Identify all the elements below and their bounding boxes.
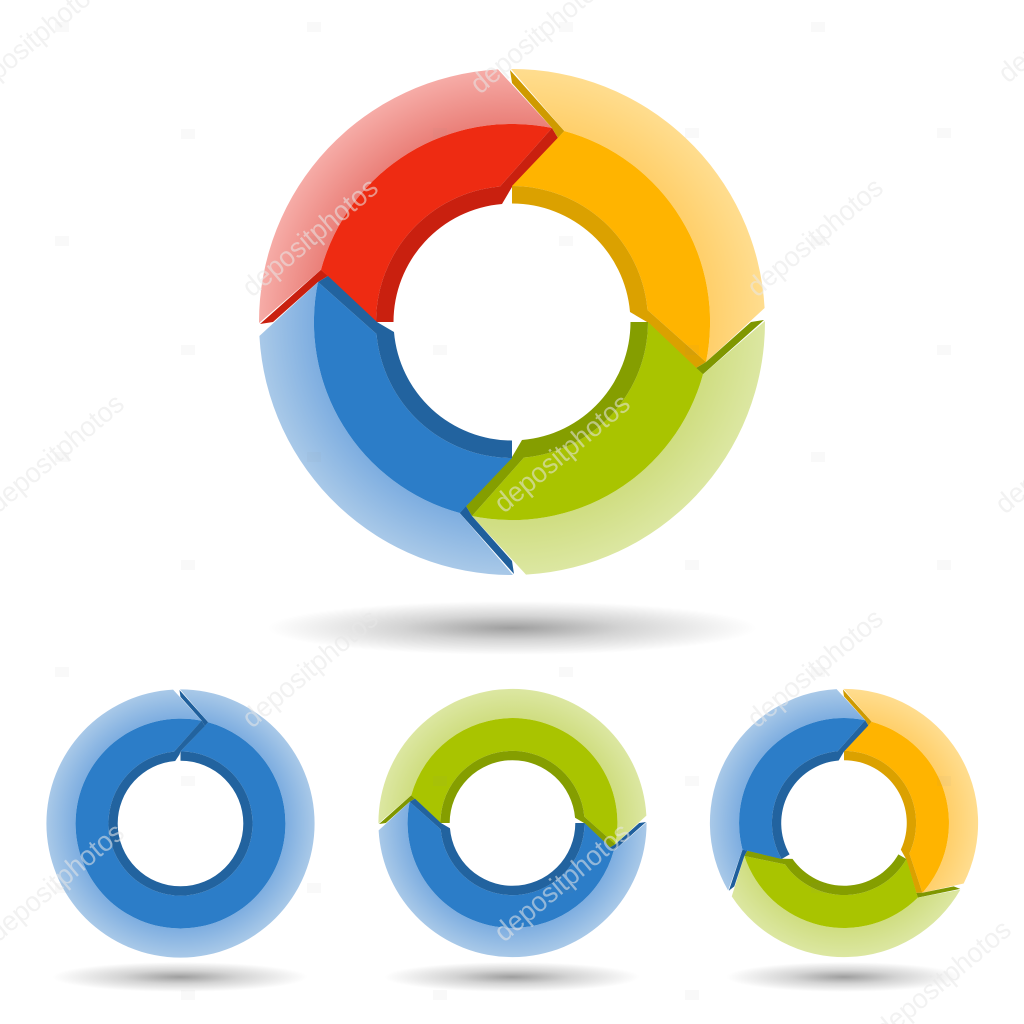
main four arrow ring (259, 69, 765, 575)
arrow: blue third (661, 672, 905, 891)
small ring: three colour arrows (661, 672, 978, 1006)
arrow: green (466, 320, 765, 575)
arrow: blue half (379, 799, 647, 957)
arrow: blue (259, 276, 514, 575)
watermark text repeated across the image: depositphotos (741, 172, 889, 303)
arrow: red (259, 69, 558, 324)
shadow: main ring (267, 601, 757, 655)
shadow: green and blue ring (384, 962, 640, 992)
small ring: single blue arrow (46, 689, 315, 958)
shadow: three colour ring (726, 962, 962, 992)
small ring: green and blue arrows (378, 689, 647, 957)
arrow: yellow third (843, 689, 978, 893)
watermark text repeated across the image: depositphotos (741, 603, 889, 734)
arrow: yellow (510, 69, 765, 368)
watermark text repeated across the image: depositphotos (488, 388, 636, 519)
arrow: green third (716, 787, 961, 1006)
shadow: blue ring (52, 962, 308, 992)
arrow: green half (378, 689, 646, 847)
watermark text repeated across the image: depositphotos (236, 172, 384, 303)
watermark text repeated across the image: depositphotos (488, 817, 636, 948)
watermark text repeated across the image: depositphotos (236, 603, 384, 734)
